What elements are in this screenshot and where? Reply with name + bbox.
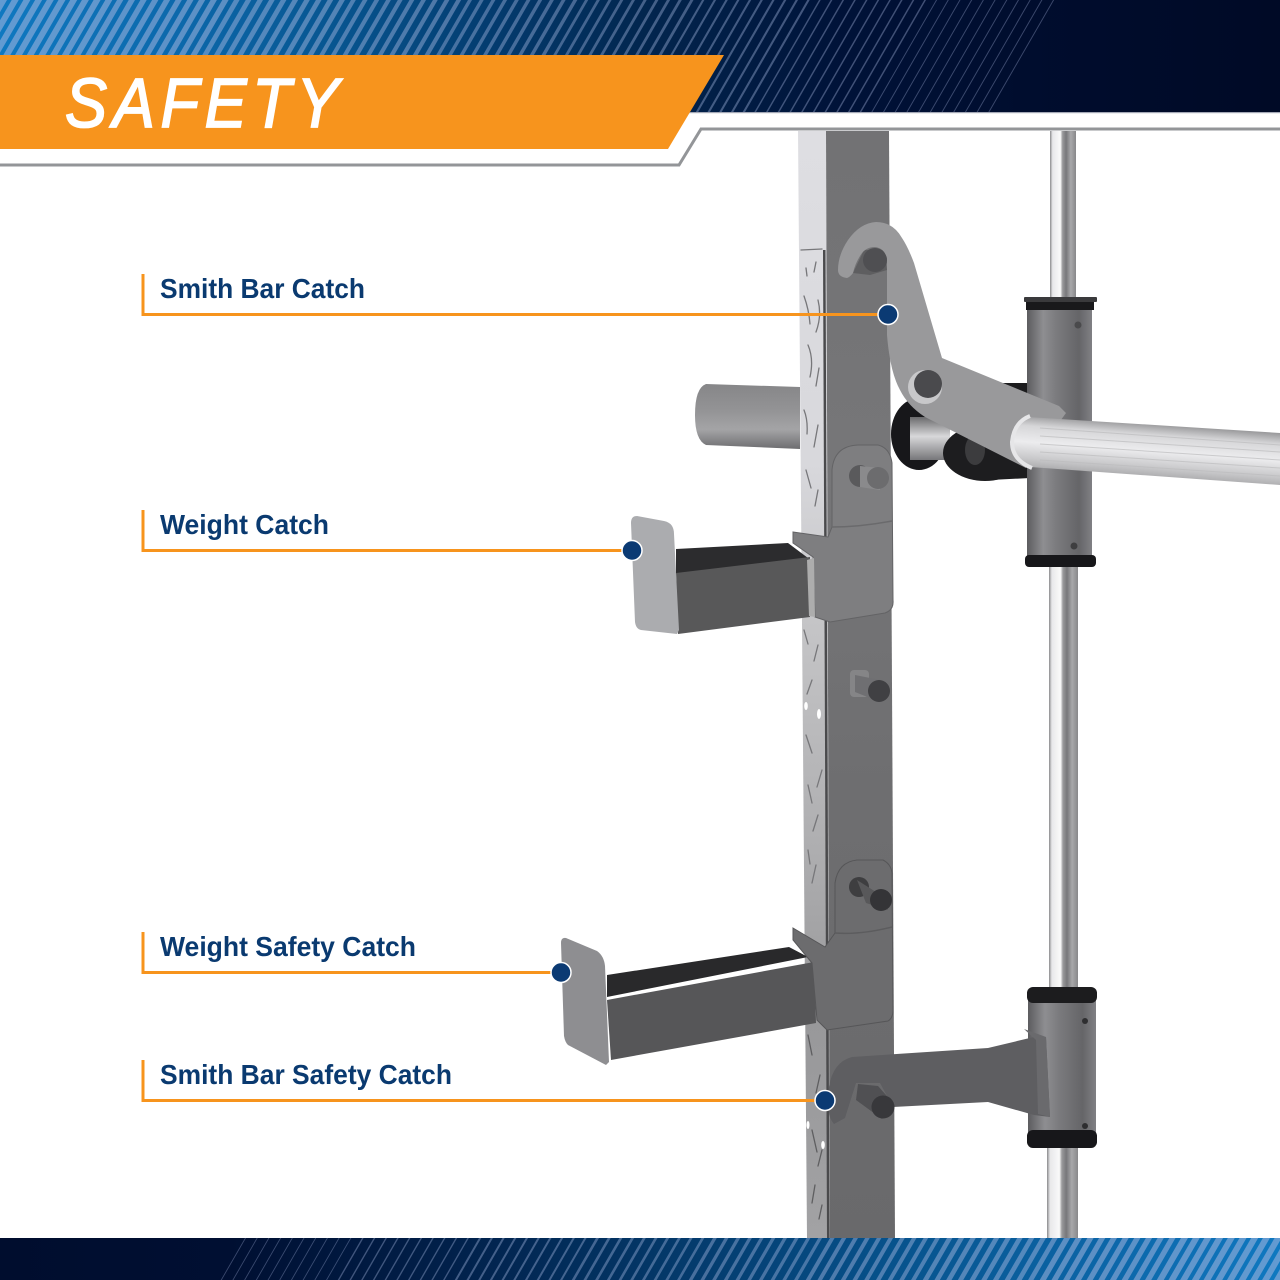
marker dot bbox=[878, 304, 898, 324]
leader line bbox=[143, 1060, 825, 1100]
middle pin bbox=[850, 670, 890, 702]
leader line bbox=[143, 274, 888, 314]
label: Weight Catch bbox=[143, 509, 642, 560]
marker dot bbox=[815, 1090, 835, 1110]
label text: Smith Bar Catch bbox=[160, 273, 365, 304]
marker dot bbox=[551, 962, 571, 982]
header band bbox=[0, 0, 1280, 113]
upright post bbox=[798, 131, 895, 1238]
lower sleeve bbox=[1027, 987, 1097, 1148]
title: SAFETY bbox=[65, 65, 343, 143]
black back plate bbox=[990, 383, 1030, 480]
marker dot bbox=[622, 540, 642, 560]
upper vertical chrome rod bbox=[1050, 131, 1076, 301]
safety catch arm bbox=[561, 938, 816, 1065]
label: Smith Bar Catch bbox=[143, 273, 898, 324]
weight catch bracket bbox=[793, 445, 893, 622]
barbell bbox=[1012, 416, 1280, 485]
leader line bbox=[143, 932, 561, 972]
upper sleeve bbox=[1024, 297, 1097, 567]
label text: Weight Safety Catch bbox=[160, 931, 416, 962]
smith bar safety catch bbox=[829, 1029, 1050, 1124]
lower vertical chrome rod bbox=[1047, 1140, 1078, 1238]
orange title banner bbox=[0, 55, 724, 149]
safety catch bracket bbox=[793, 860, 893, 1030]
smith bar catch hook bbox=[838, 222, 1066, 468]
roller wheels bbox=[891, 398, 1027, 481]
equipment illustration bbox=[561, 131, 1280, 1238]
label: Weight Safety Catch bbox=[143, 931, 571, 982]
label text: Smith Bar Safety Catch bbox=[160, 1059, 452, 1090]
middle vertical chrome rod bbox=[1049, 562, 1078, 992]
label: Smith Bar Safety Catch bbox=[143, 1059, 835, 1110]
back left cylinder bbox=[695, 384, 800, 449]
weight catch arm bbox=[631, 516, 810, 634]
footer band bbox=[0, 1238, 1280, 1280]
leader line bbox=[143, 510, 632, 550]
label text: Weight Catch bbox=[160, 509, 329, 540]
